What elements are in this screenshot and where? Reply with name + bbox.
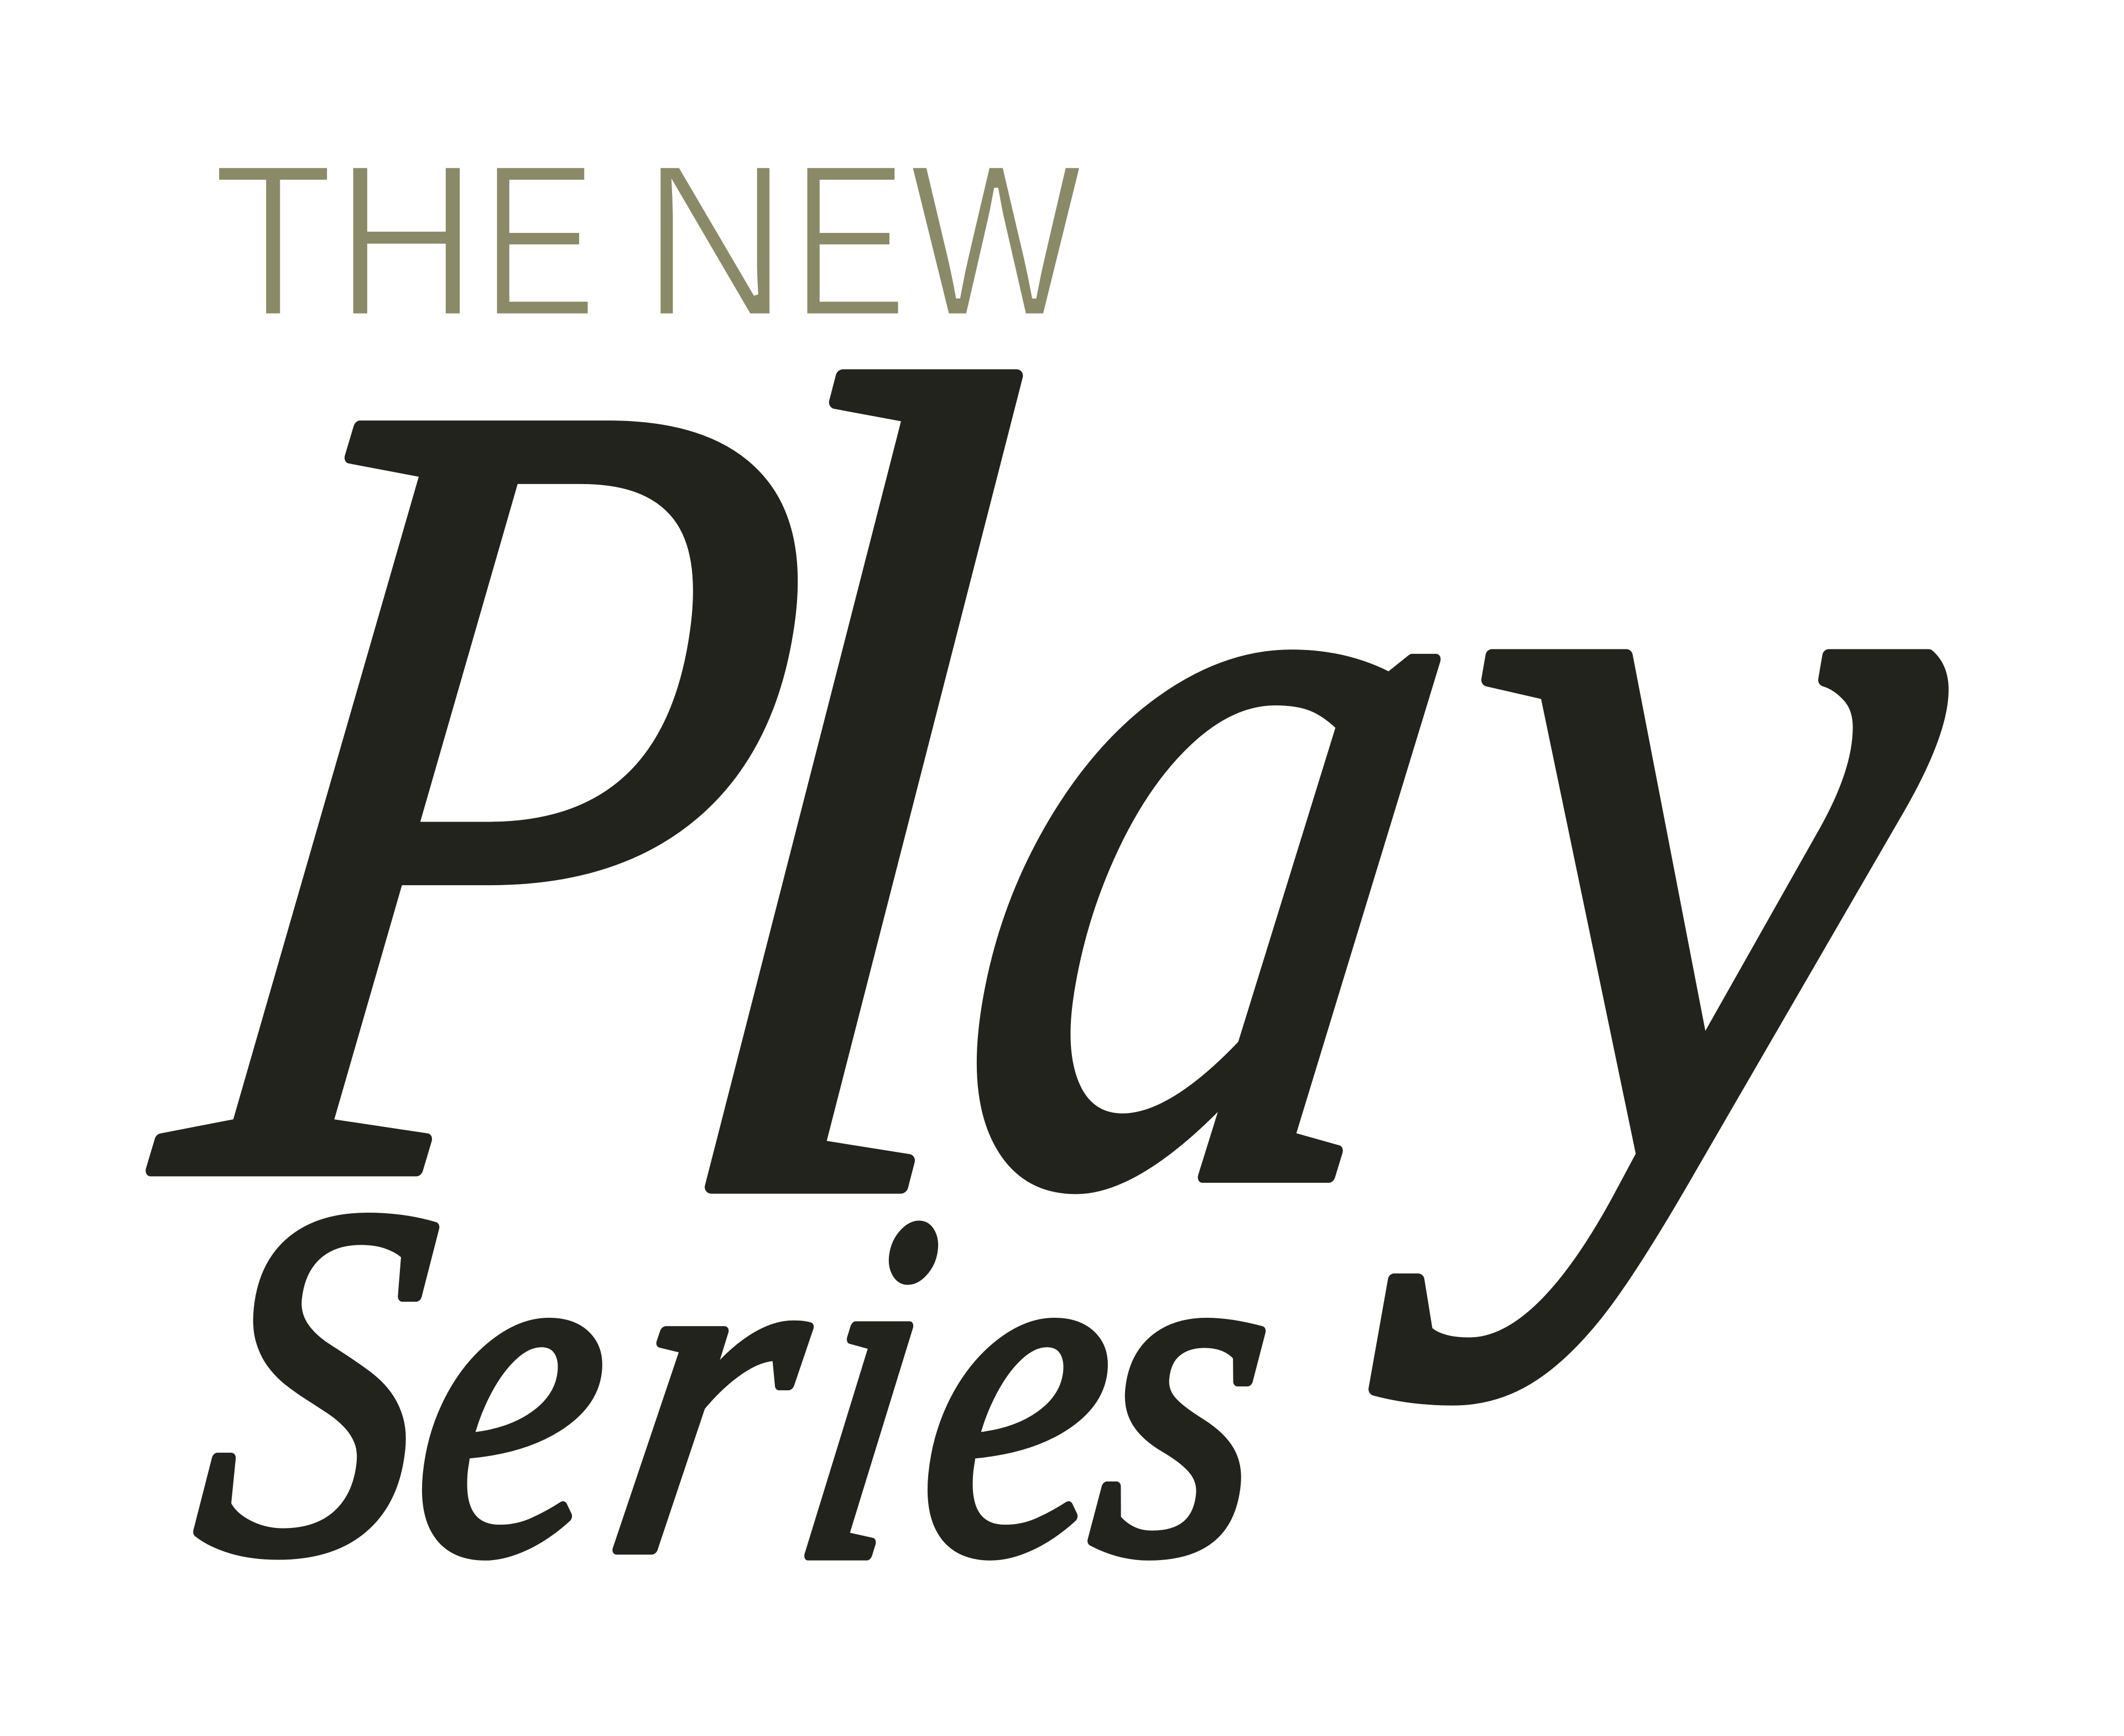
heading: Series (180, 1105, 1295, 1662)
heading: THE NEW: T (212, 118, 334, 363)
heading: Series: S (180, 1105, 454, 1657)
heading: Series: i (769, 1113, 969, 1662)
heading: Play (107, 146, 1951, 1439)
heading: THE NEW (212, 118, 1084, 363)
heading: Play: P (107, 160, 878, 1415)
heading: Series: s (1075, 1122, 1295, 1655)
heading: Play: a (896, 192, 1543, 1415)
heading: Series: r (582, 1127, 850, 1651)
heading: THE NEW: W (909, 119, 1084, 362)
heading: Play: l (629, 146, 1060, 1439)
heading: THE NEW: E (791, 118, 908, 362)
heading: Play: y (1364, 180, 1951, 1402)
heading: THE NEW: N (642, 118, 788, 362)
heading: THE NEW: H (335, 118, 478, 363)
heading: Series: e (396, 1121, 633, 1654)
heading: Series: e (902, 1121, 1138, 1654)
heading: THE NEW: E (481, 118, 597, 362)
